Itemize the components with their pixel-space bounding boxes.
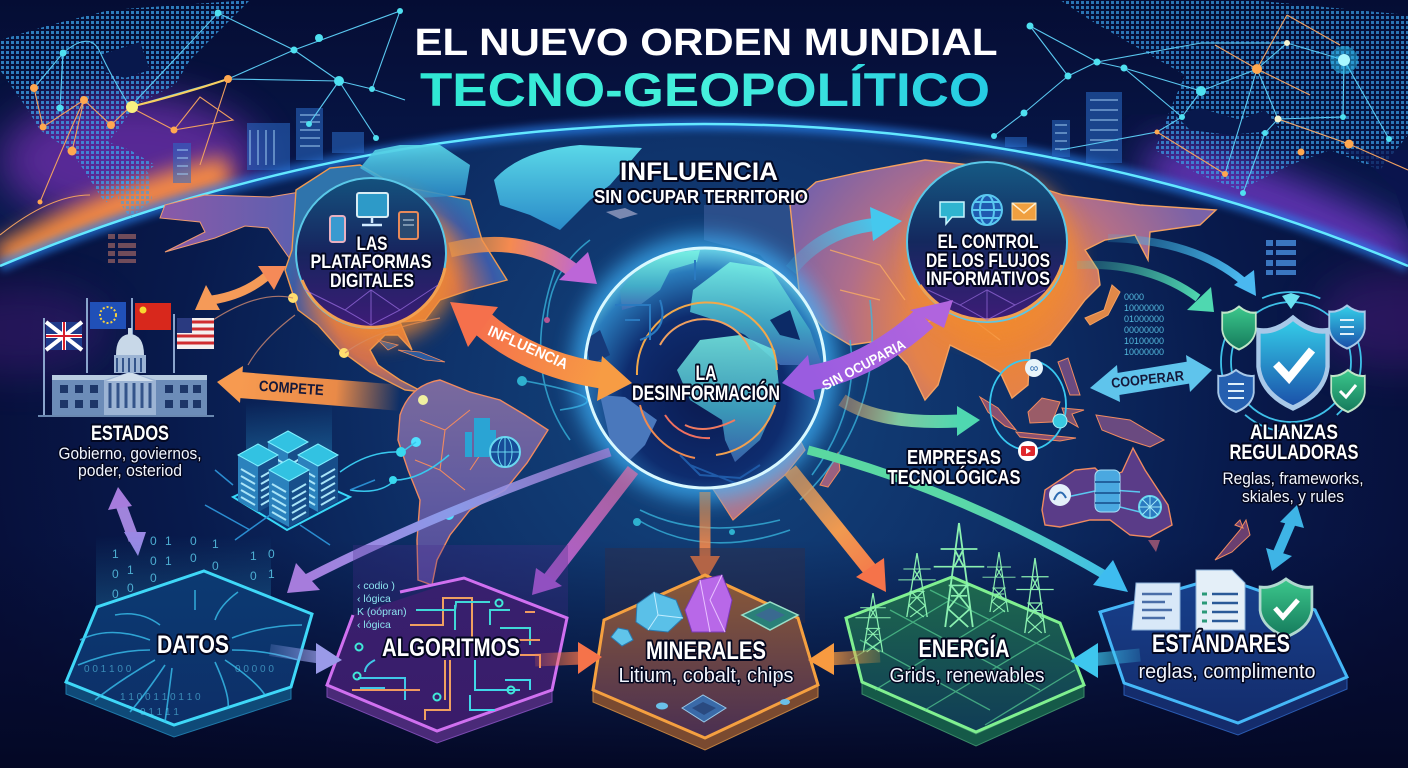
alaska [160,192,305,262]
pebbles [656,673,790,710]
panel: datos: 0 1 1 1 1 [140,707,179,718]
arrow: globe to minerales [690,492,720,582]
label: estándares [1138,629,1316,683]
binary rain: 1 [268,567,275,581]
label: las plataformas digitales [310,234,432,292]
orbital rings around globe [517,240,872,543]
icon: small blue rock [611,628,633,646]
panel: empresas tecnológicas [888,359,1067,489]
greenland [494,145,642,230]
panel: datos: 0 0 0 0 0 [235,664,274,675]
arrow: estados and plataformas [195,266,286,310]
panel: estados [38,298,214,480]
binary block: 10100000 [1124,336,1164,346]
label: energía: ENERGÍA [918,634,1010,663]
europe fringe [704,205,800,300]
label: energía [890,634,1044,687]
label: estados: Gobierno, goviernos, [58,444,202,463]
label: datos: DATOS [157,631,229,659]
arrow: algoritmos to minerales [535,642,602,674]
binary rain: 0 [190,534,197,548]
binary rain: 1 [212,537,219,551]
arrow: control to alianzas blue [1108,238,1256,296]
binary block: 10000000 [1124,347,1164,357]
australia and new zealand [1042,448,1172,537]
icon: purple crystal [685,575,732,632]
binary rain: 0 [190,551,197,565]
arrow: globe to estándares [808,450,1128,592]
code snippet: ‹ codio ) [357,580,395,592]
arrow: globe to control [791,207,902,270]
arrow: estados and datos [108,487,146,556]
binary rain: 1 [127,563,134,577]
arrow: control to alianzas teal [1077,265,1214,312]
panel: datos: 1 1 0 0 1 1 0 1 1 0 [120,692,201,703]
panel: energía [846,523,1084,746]
label: el control de los flujos informativos: EL CONTROL [938,232,1039,253]
southeast asia islands [980,397,1016,430]
circle: las plataformas digitales [296,178,456,342]
label: minerales: Litium, cobalt, chips [618,665,794,687]
arrow: alianzas and estándares [1266,505,1304,571]
icons: australia data [1049,470,1161,518]
binary rain: 0 [112,567,119,581]
binary rain: 0 [150,571,157,585]
arrow: sin ocuparia [782,300,953,400]
north america [285,165,507,392]
binary rain [96,534,275,610]
icon: envelope [1012,203,1036,220]
label: estándares: reglas, complimento [1138,661,1316,683]
binary rain: 0 [250,589,257,603]
arrow: globe to algoritmos [532,470,633,595]
binary rain: 0 [250,569,257,583]
label: la desinformación [632,362,780,405]
influencia heading: SIN OCUPAR TERRITORIO [594,187,808,207]
icon: globe [972,195,1002,225]
binary rain: 0 [150,534,157,548]
icon: green shield [1260,579,1312,637]
label: alianzas reguladoras: ALIANZAS [1250,421,1338,444]
binary rain: 1 [112,547,119,561]
map nodes [288,293,454,520]
binary block: 0000 [1124,292,1144,302]
label: las plataformas digitales: DIGITALES [330,271,414,292]
label: estándares: ESTÁNDARES [1152,629,1290,658]
binary block: 10000000 [1124,303,1164,313]
binary block: 00000000 [1124,325,1164,335]
arrow: compete [217,366,402,403]
world map continents [160,145,1250,585]
binary rain: 0 [190,589,197,603]
label: minerales [618,637,794,687]
label: empresas tecnológicas: TECNOLÓGICAS [888,465,1020,489]
panel: datos [66,534,312,737]
label: empresas tecnológicas: EMPRESAS [907,447,1001,469]
label: algoritmos: ALGORITMOS [382,634,520,662]
arrow: globe to energía [790,470,886,592]
panel: algoritmos [327,545,568,743]
arrow: compete: COMPETE [258,378,324,399]
label: alianzas reguladoras [1222,421,1364,506]
code snippet [357,580,407,631]
icon: shield bottom right [1331,370,1365,412]
arrow: cooperar: COOPERAR [1110,367,1185,391]
code snippet: ‹ lógica [357,619,391,631]
arrow: plataformas to globe [450,244,597,284]
label: la desinformación: LA [696,362,716,385]
label: alianzas reguladoras: REGULADORAS [1230,441,1358,464]
icon: shield bottom left [1218,370,1254,412]
label: alianzas reguladoras: skiales, y rules [1242,487,1344,506]
icon: small list left [108,234,136,263]
asia [790,160,1216,400]
panel: minerales [593,548,818,750]
binary rain: 1 [250,549,257,563]
label: el control de los flujos informativos: INFORMATIVOS [926,269,1050,290]
icon: teal target [1053,414,1067,428]
binary rain: 0 [268,547,275,561]
icon: infinity app [1025,359,1043,377]
arrow: sin ocuparia: SIN OCUPARIA [819,336,908,393]
arrow: influencia [450,302,632,401]
panel: estándares [1100,570,1347,735]
binary rain: 1 [165,534,172,548]
title: EL NUEVO ORDEN MUNDIAL [414,22,997,64]
code snippet: ‹ lógica [357,593,391,605]
label: el control de los flujos informativos: DE LOS FLUJOS [926,251,1050,272]
central globe [572,235,838,501]
binary rain: 0 [112,587,119,601]
icon: scroll document [1132,583,1180,630]
icon: bottom chip [682,695,726,722]
icon: shield top left [1222,306,1256,350]
influencia heading: INFLUENCIA [620,158,778,186]
icon: city and globe [465,418,520,467]
icon: capitol building [38,328,214,416]
arrow: cooperar [1090,355,1212,402]
label: el control de los flujos informativos [926,232,1050,290]
icon: chip [742,602,798,630]
code snippet: K (oópran) [357,606,407,618]
arrow: globe to datos [287,452,610,593]
title [414,22,997,116]
arrow: energía to minerales [808,643,880,675]
icon: tablet [399,212,418,239]
label: energía: Grids, renewables [890,665,1044,687]
top-right dotted map and network [991,0,1408,230]
binary rain: 0 [212,579,219,593]
africa lower [700,440,805,520]
label: la desinformación: DESINFORMACIÓN [632,381,780,405]
label: minerales: MINERALES [646,637,766,665]
icon: phone [330,216,345,242]
icon: small list right [1266,240,1296,275]
icon: blue rock [636,592,683,632]
label: estados: ESTADOS [91,422,169,445]
arrow: estándares to energía [1070,643,1140,678]
binary block: 01000000 [1124,314,1164,324]
icon: video play [1018,441,1038,461]
binary block [1124,292,1164,357]
arrow: datos to algoritmos [270,643,342,674]
label: las plataformas digitales: LAS [356,234,388,255]
icon: monitor [357,193,388,225]
icon: top diamond [1282,293,1300,309]
label: alianzas reguladoras: Reglas, frameworks, [1222,469,1364,488]
binary rain: 0 [127,581,134,595]
icon: data center servers [205,402,375,545]
label: estados: poder, osteriod [78,461,182,480]
panel: alianzas reguladoras [1218,292,1365,506]
icon: chat bubble [940,202,964,224]
title: TECNO-GEOPOLÍTICO [420,63,990,116]
icon: shield top right [1329,306,1365,348]
icon: flags [44,298,214,415]
binary rain: 0 [150,554,157,568]
icon: main shield [1258,318,1328,408]
circle: el control de los flujos informativos [907,162,1076,339]
label: estados [58,422,202,480]
icon: checklist document [1196,570,1245,630]
top-left dotted map and network [0,0,405,235]
icon: infinity app: ∞ [1030,361,1038,375]
binary rain: 1 [165,554,172,568]
label: las plataformas digitales: PLATAFORMAS [310,252,432,273]
label: empresas tecnológicas [888,447,1020,489]
panel: datos: 0 0 1 1 0 0 [84,664,132,675]
binary rain: 0 [212,559,219,573]
arrow: globe to empresas [842,400,980,436]
arrow: influencia: INFLUENCIA [485,323,571,373]
influencia heading [594,158,808,207]
south america [398,380,548,585]
icon: transmission towers [855,523,1054,652]
